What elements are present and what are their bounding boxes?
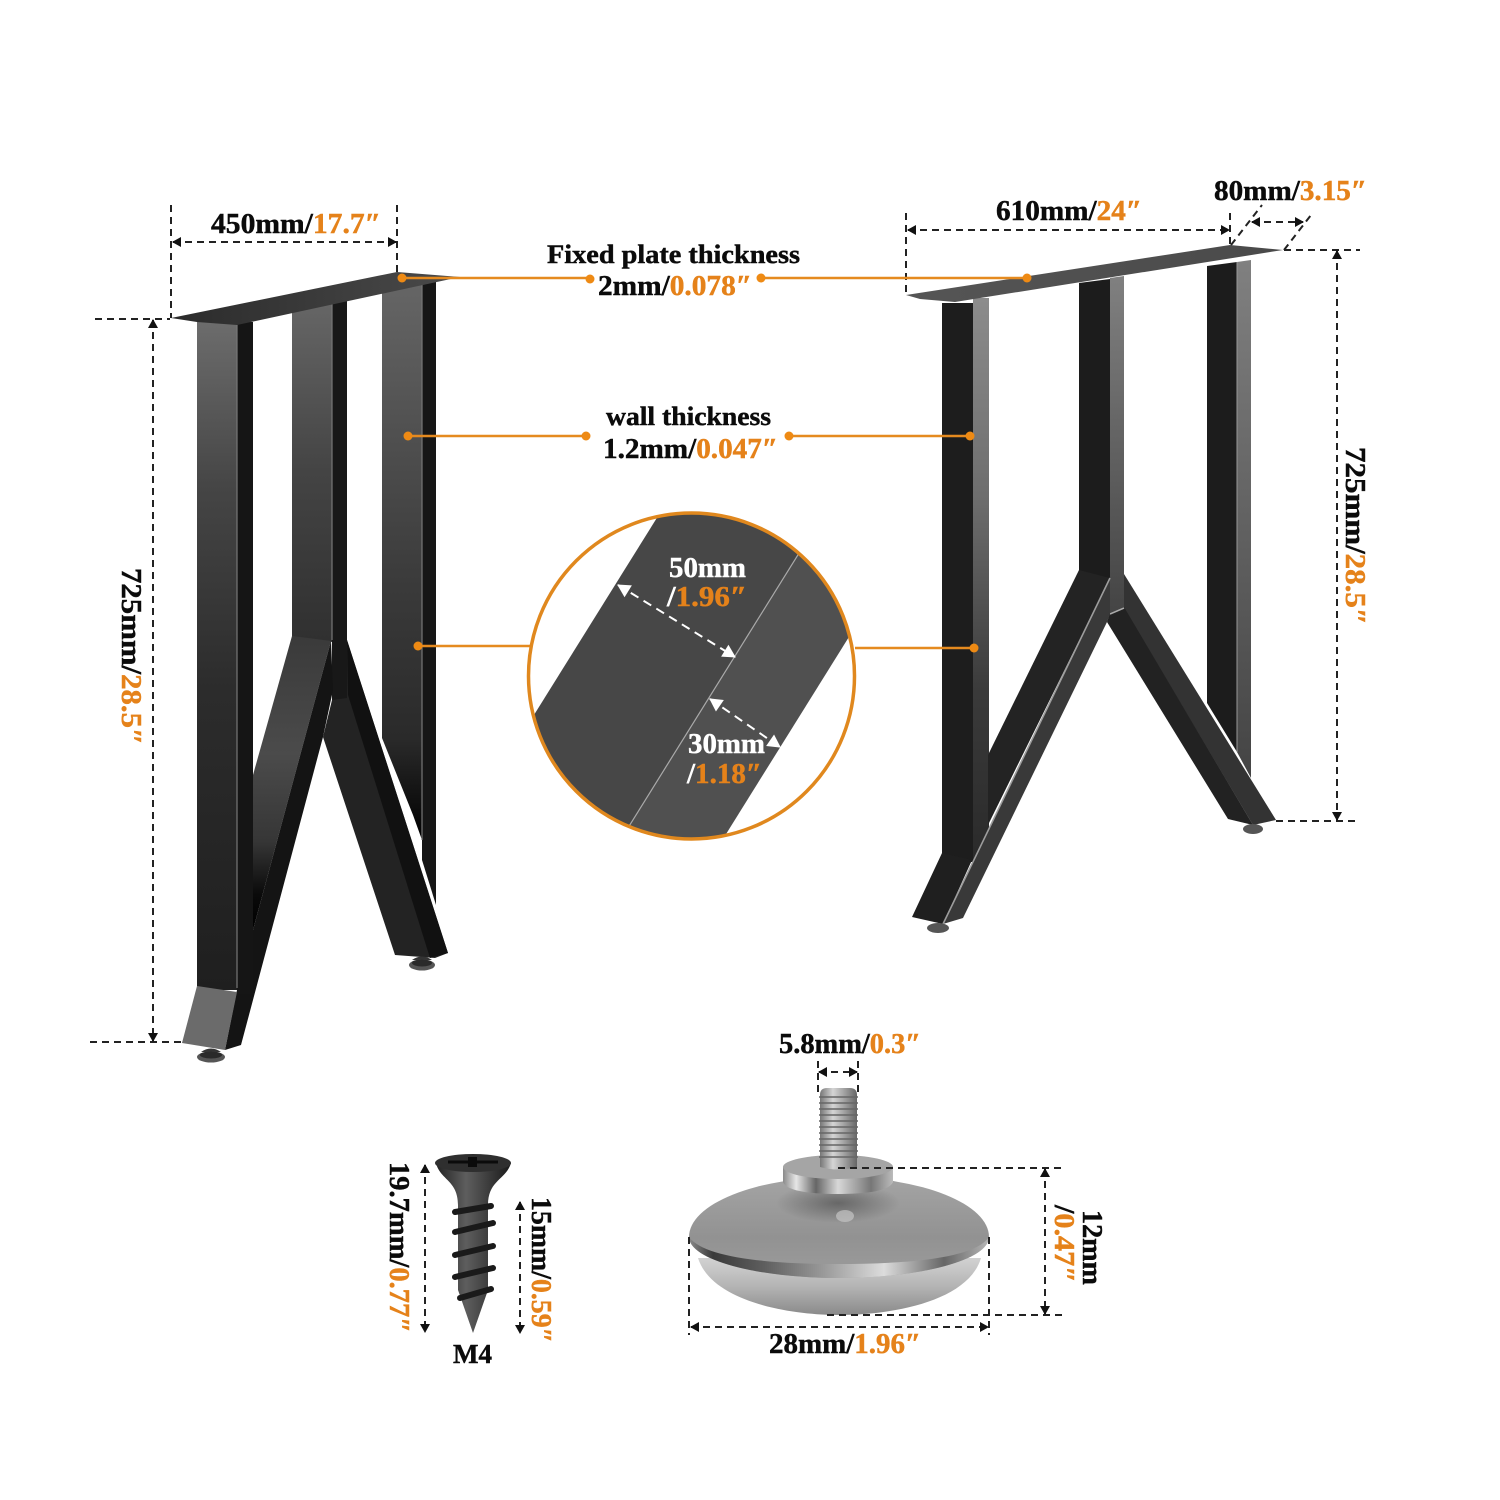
screw size label: M4	[453, 1339, 492, 1369]
right leg rear diagonal	[1107, 574, 1276, 825]
screw head	[435, 1154, 511, 1172]
right table leg	[906, 245, 1283, 933]
screw	[435, 1154, 511, 1333]
left leg rear diagonal	[323, 640, 448, 958]
right leg front post	[942, 298, 989, 862]
foot dimensions	[689, 1029, 1107, 1360]
threaded stem	[819, 1088, 858, 1170]
callout: wall thickness: 1.2mm/0.047″	[603, 434, 778, 465]
foot dimensions: 5.8mm/0.3″	[779, 1029, 921, 1060]
right leg foot	[912, 853, 972, 924]
ridge on right leg	[943, 578, 1110, 924]
left leg back post	[382, 277, 436, 905]
screw length dimensions: 19.7mm/ 0.77″	[383, 1162, 414, 1333]
left leg grey foot	[182, 986, 237, 1050]
left leg plate	[171, 272, 460, 325]
right leg plate	[906, 245, 1283, 302]
right leg front diagonal	[943, 570, 1110, 924]
dimensions: left leg width	[171, 205, 397, 318]
foot dome	[689, 1177, 989, 1278]
30mm dimension: 30mm	[688, 729, 765, 760]
screw length dimensions: 15mm/ 0.59″	[525, 1197, 556, 1343]
leveling pad left rear	[409, 956, 435, 970]
screw length dimensions	[383, 1162, 556, 1343]
dome reflection	[776, 1183, 900, 1223]
callout: fixed plate thickness: Fixed plate thickness	[547, 240, 800, 269]
screw threads	[455, 1206, 493, 1298]
tube faces	[534, 514, 848, 838]
foot dimensions: 28mm/1.96″	[769, 1329, 921, 1360]
dimensions: left leg height: 725mm/ 28.5″	[115, 568, 147, 745]
screw shaft	[436, 1163, 511, 1333]
left leg front diagonal	[225, 636, 333, 1050]
leveling foot	[689, 1088, 989, 1315]
leveling pad right front	[927, 923, 949, 933]
dimensions: left leg height	[90, 319, 182, 1042]
30mm dimension	[686, 699, 780, 790]
left leg middle post	[292, 298, 347, 702]
leveling pad left front	[197, 1048, 225, 1062]
50mm dimension	[618, 553, 747, 657]
callout: fixed plate thickness	[398, 240, 1032, 302]
dimensions: right leg width: 610mm/24″	[996, 195, 1142, 227]
callout: fixed plate thickness: 2mm/0.078″	[598, 271, 752, 302]
30mm dimension: /1.18″	[686, 759, 762, 790]
50mm dimension: 50mm	[669, 553, 746, 584]
foot base	[698, 1258, 981, 1315]
dimensions: plate depth: 80mm/3.15″	[1214, 175, 1367, 207]
foot dimensions: 12mm	[1076, 1210, 1107, 1285]
dimensions: plate depth	[1214, 175, 1367, 250]
magnifier connector lines	[414, 642, 978, 652]
foot rim	[689, 1237, 989, 1278]
callout: wall thickness: wall thickness	[606, 402, 771, 431]
foot dimensions: / 0.47″	[1048, 1204, 1079, 1283]
50mm dimension: /1.96″	[666, 582, 747, 613]
leveling pad right rear	[1243, 824, 1263, 834]
dimensions: right leg width	[906, 195, 1230, 295]
right leg middle post	[1079, 276, 1124, 614]
dimensions: right leg height	[1276, 250, 1371, 821]
foot collar	[783, 1155, 893, 1194]
left leg front post	[197, 322, 253, 994]
dimensions: right leg height: 725mm/ 28.5″	[1339, 447, 1371, 625]
dimensions: left leg width: 450mm/17.7″	[211, 208, 381, 240]
magnified tube detail	[526, 511, 856, 841]
left table leg	[171, 272, 460, 1062]
callout: wall thickness	[404, 402, 974, 465]
right leg back post	[1207, 260, 1251, 778]
